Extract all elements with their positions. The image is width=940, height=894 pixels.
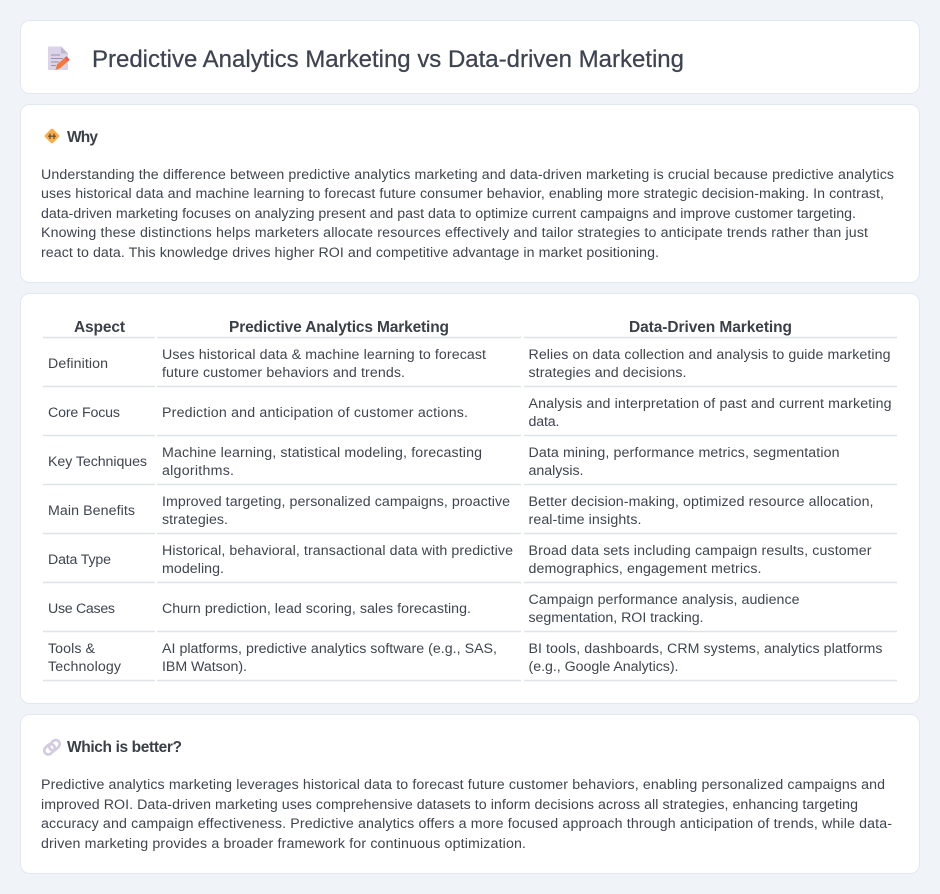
row: key techniques: analysis. (528, 463, 584, 479)
table header: Data-Driven Marketing (629, 319, 792, 336)
row: definition: Uses historical data & machine learning to forecast (162, 347, 486, 363)
heading: which is better: Which is better? (67, 739, 182, 756)
title: Predictive Analytics Marketing vs Data-driven Marketing (92, 46, 684, 73)
panel: which is better (20, 714, 920, 874)
row: tools and technology: Tools & (48, 641, 96, 657)
row: core focus: Analysis and interpretation of past and current marketing (528, 396, 892, 412)
row: main benefits: strategies. (162, 512, 228, 528)
row: use cases: segmentation, ROI tracking. (528, 610, 704, 626)
row: use cases: Use Cases (48, 601, 115, 617)
row: tools and technology: AI platforms, predictive analytics software (e.g., SAS, (162, 641, 497, 657)
row: tools and technology (43, 641, 897, 680)
row: data type (43, 543, 897, 582)
heading: why: Why (67, 129, 98, 146)
row: tools and technology: BI tools, dashboards, CRM systems, analytics platforms (528, 641, 882, 657)
row: use cases: Campaign performance analysis, audience (528, 592, 800, 608)
row: data type: modeling. (162, 561, 224, 577)
row: definition: strategies and decisions. (528, 365, 686, 381)
panel: why (20, 104, 920, 282)
text block: why paragraph: Understanding the difference between predictive analytics marketing and data-driven marketing is crucial because predictive analytics (41, 167, 894, 183)
text block: which is better paragraph: driven marketing provides a broader framework for continuous optimization. (41, 836, 526, 852)
panel: comparison table (20, 294, 920, 704)
text block: which is better paragraph (41, 777, 892, 852)
row: data type: Broad data sets including campaign results, customer (528, 543, 872, 559)
row: main benefits: Better decision-making, optimized resource allocation, (528, 494, 874, 510)
row: key techniques: Machine learning, statistical modeling, forecasting (162, 445, 482, 461)
text block: which is better paragraph: Predictive analytics marketing leverages historical data to forecast future customer behaviors, enabling personalized campaigns and (41, 777, 885, 793)
icon: document with pencil (48, 46, 70, 70)
row: key techniques (43, 445, 897, 484)
row: use cases: Churn prediction, lead scoring, sales forecasting. (162, 601, 471, 617)
text block: why paragraph: Knowing these distinctions helps marketers allocate resources effectively and tailor strategies to anticipate trends rather than just (41, 225, 868, 241)
row: tools and technology: Technology (48, 659, 122, 675)
text block: which is better paragraph: accuracy and campaign effectiveness. Predictive analytics offers a more focused approach through anticipation of trends, while data- (41, 816, 892, 832)
row: definition: Relies on data collection and analysis to guide marketing (528, 347, 890, 363)
row: definition (43, 347, 897, 386)
row: definition: Definition (48, 356, 108, 372)
table header: Predictive Analytics Marketing (229, 319, 449, 336)
row: data type: demographics, engagement metrics. (528, 561, 762, 577)
row: use cases (43, 592, 897, 632)
row: key techniques: algorithms. (162, 463, 234, 479)
text block: why paragraph: data-driven marketing focuses on analyzing present and past data to optimize current campaigns and improve customer targeting. (41, 206, 856, 222)
row: tools and technology: (e.g., Google Analytics). (528, 659, 678, 675)
row: core focus (43, 396, 897, 436)
row: core focus: Prediction and anticipation of customer actions. (162, 405, 468, 421)
text block: why paragraph: react to data. This knowledge drives higher ROI and competitive advantage in market positioning. (41, 245, 659, 261)
row: tools and technology: IBM Watson). (162, 659, 247, 675)
row: data type: Historical, behavioral, transactional data with predictive (162, 543, 513, 559)
text block: why paragraph: uses historical data and machine learning to forecast future consumer behavior, enabling more strategic decision-making. In contrast, (41, 186, 884, 202)
row: main benefits: Improved targeting, personalized campaigns, proactive (162, 494, 510, 510)
icon: warning diamond (44, 128, 60, 144)
row: key techniques: Key Techniques (48, 454, 147, 470)
row: main benefits: Main Benefits (48, 503, 135, 519)
row: data type: Data Type (48, 552, 111, 568)
text block: which is better paragraph: improved ROI. Data-driven marketing uses comprehensive datasets to inform decisions across all strategies, enhancing targeting (41, 797, 858, 813)
row: main benefits: real-time insights. (528, 512, 642, 528)
row: core focus: data. (528, 414, 560, 430)
icon: chain link (43, 738, 61, 756)
row: key techniques: Data mining, performance metrics, segmentation (528, 445, 840, 461)
text block: why paragraph (41, 167, 894, 261)
table header: Aspect (74, 319, 125, 336)
panel: title header (20, 20, 920, 94)
row: definition: future customer behaviors and trends. (162, 365, 405, 381)
row: core focus: Core Focus (48, 405, 120, 421)
table header (43, 319, 897, 338)
row: main benefits (43, 494, 897, 534)
